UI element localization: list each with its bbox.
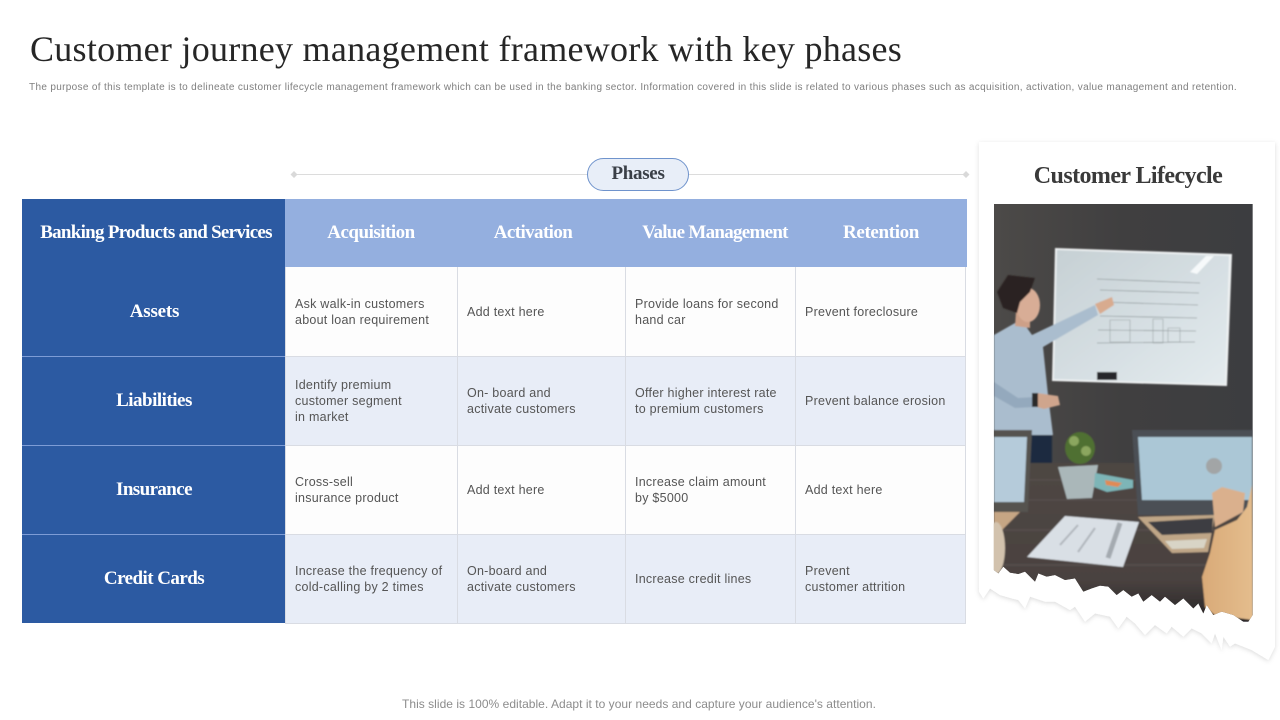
whiteboard xyxy=(1052,248,1232,386)
header: acquisition: Acquisition xyxy=(327,222,415,243)
cell xyxy=(626,267,796,357)
cell: Add text here xyxy=(467,483,545,497)
header band: phases xyxy=(285,199,967,267)
row label: assets xyxy=(22,267,285,357)
row label: insurance xyxy=(22,446,285,535)
header: activation: Activation xyxy=(494,222,572,243)
cell xyxy=(285,535,458,624)
cell xyxy=(285,357,458,446)
row label: credit cards xyxy=(22,535,285,623)
cell: Increase claim amount xyxy=(635,475,766,489)
cell xyxy=(626,446,796,535)
cell: activate customers xyxy=(467,402,576,416)
cell: to premium customers xyxy=(635,402,764,416)
row label: credit cards: Credit Cards xyxy=(104,568,204,589)
left person head xyxy=(994,522,1006,574)
cell xyxy=(458,446,626,535)
cell: Cross-sell xyxy=(295,475,353,489)
colorful booklet xyxy=(1094,473,1133,492)
card background xyxy=(979,142,1275,660)
cell: about loan requirement xyxy=(295,312,429,326)
phases pill: Phases xyxy=(611,163,665,184)
phases connector line xyxy=(290,171,970,178)
cell: hand car xyxy=(635,312,686,326)
cell: Offer higher interest rate xyxy=(635,386,777,400)
cell: insurance product xyxy=(295,491,399,505)
cell: cold-calling by 2 times xyxy=(295,580,424,594)
cell: by $5000 xyxy=(635,491,688,505)
cell: Add text here xyxy=(467,304,545,318)
cell xyxy=(626,357,796,446)
phases pill xyxy=(587,158,689,191)
seated person arm xyxy=(1202,485,1253,620)
cell xyxy=(458,535,626,624)
cell: Prevent balance erosion xyxy=(805,394,946,408)
row label: liabilities xyxy=(22,357,285,446)
right laptop xyxy=(1132,430,1253,553)
cell: Identify premium xyxy=(295,378,391,392)
header: value management: Value Management xyxy=(642,222,788,243)
cell xyxy=(285,446,458,535)
subtitle description: The purpose of this template is to delineate customer lifecycle management framework which can be used in the banking sector. Information covered in this slide is related to various phases such as acquisition, activation, value management and retention. xyxy=(29,82,1237,93)
cell xyxy=(626,535,796,624)
cell: Ask walk-in customers xyxy=(295,296,425,310)
row label: assets: Assets xyxy=(130,300,179,322)
title: Customer journey management framework with key phases xyxy=(30,29,902,69)
cell: Prevent xyxy=(805,564,850,578)
photo: team meeting at whiteboard xyxy=(987,204,1253,629)
cell xyxy=(458,357,626,446)
cell xyxy=(796,535,966,624)
potted plant xyxy=(1058,432,1098,499)
cell xyxy=(796,446,966,535)
header: banking products and services xyxy=(22,199,285,267)
cell xyxy=(796,357,966,446)
cell xyxy=(458,267,626,357)
cell: Prevent foreclosure xyxy=(805,304,918,318)
panel: customer lifecycle card with torn photo xyxy=(978,142,1276,662)
cell: Add text here xyxy=(805,483,883,497)
cell xyxy=(796,267,966,357)
cell: Provide loans for second xyxy=(635,296,779,310)
cell: customer attrition xyxy=(805,580,905,594)
card heading: Customer Lifecycle xyxy=(1034,163,1223,189)
header: banking products and services: Banking Products and Services xyxy=(40,222,272,243)
header: retention: Retention xyxy=(843,222,919,243)
cell: On- board and xyxy=(467,386,551,400)
cell: customer segment xyxy=(295,394,402,408)
cell: On-board and xyxy=(467,564,547,578)
conference table xyxy=(994,463,1253,629)
cell: Increase the frequency of xyxy=(295,564,442,578)
footer note: This slide is 100% editable. Adapt it to your needs and capture your audience's attention. xyxy=(402,697,876,711)
row label: liabilities: Liabilities xyxy=(116,390,192,411)
cell: Increase credit lines xyxy=(635,572,751,586)
paper sheet xyxy=(1027,516,1139,567)
cell: activate customers xyxy=(467,580,576,594)
table xyxy=(22,199,967,624)
cell xyxy=(285,267,458,357)
left laptop xyxy=(994,430,1032,530)
presenter xyxy=(994,275,1114,465)
cell: in market xyxy=(295,410,349,424)
row label: insurance: Insurance xyxy=(116,479,192,500)
